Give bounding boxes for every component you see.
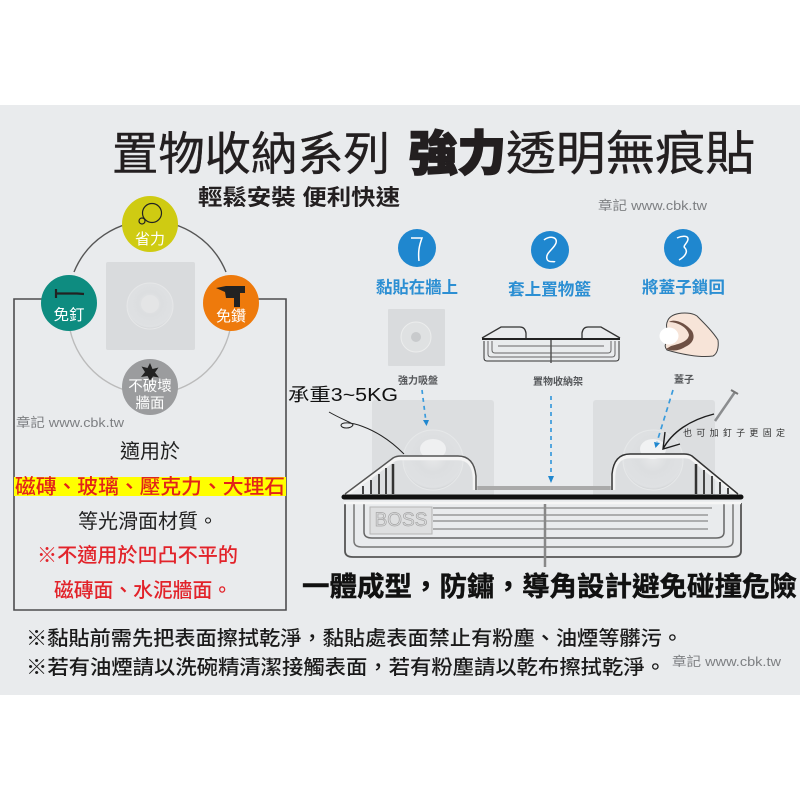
- BOSS plate: [370, 507, 432, 534]
- warning text: 磁磚面、水泥牆面。: [54, 579, 232, 602]
- text: applicable to: 適用於: [120, 440, 180, 463]
- curved arrow to cup: [663, 414, 714, 449]
- small part labels: [398, 373, 694, 388]
- step labels: 套上置物籃: [508, 279, 591, 299]
- badge: no drilling: [203, 275, 259, 331]
- badge: save effort: 省力: [135, 231, 165, 248]
- step 3 icon: [664, 229, 702, 267]
- highlighted materials: 磁磚、玻璃、壓克力、大理石: [15, 476, 285, 498]
- step labels: [376, 277, 725, 299]
- suction sticker center: [106, 262, 195, 350]
- subtitle: 輕鬆安裝 便利快速: [198, 185, 400, 210]
- badge: no wall damage: 牆面: [136, 395, 164, 412]
- badge: save effort: [122, 196, 178, 252]
- small basket: [482, 327, 620, 363]
- watermark bottom: 章記 www.cbk.tw: [672, 654, 782, 669]
- title: [112, 127, 755, 181]
- small part labels: 蓋子: [674, 373, 694, 386]
- hand holding cap: [660, 313, 718, 357]
- dashed arrow center: [548, 396, 554, 483]
- badge: no drilling: 免鑽: [216, 308, 246, 325]
- basket: [344, 454, 741, 567]
- right wall sticker: [593, 400, 715, 497]
- handwritten note: 也可加釘子更固定: [683, 427, 785, 438]
- small sticker: [388, 309, 445, 366]
- small part labels: 置物收納架: [533, 375, 583, 388]
- background panel: [0, 105, 800, 695]
- badge: no wall damage: [122, 359, 178, 415]
- title: 透明無痕貼: [506, 127, 755, 180]
- step labels: 將蓋子鎖回: [642, 277, 725, 297]
- step 2 icon: [531, 231, 569, 269]
- watermark top: 章記 www.cbk.tw: [598, 198, 708, 213]
- left wall sticker: [372, 400, 494, 497]
- watermark left: 章記 www.cbk.tw: [16, 415, 125, 430]
- cleaning note 2: ※若有油煙請以洗碗精清潔接觸表面，若有粉塵請以乾布擦拭乾淨。: [26, 656, 666, 679]
- badge: no nails: [41, 275, 97, 331]
- BOSS plate: BOSS: [375, 510, 427, 531]
- dashed arrow left: [422, 390, 429, 426]
- warning text: [37, 544, 238, 602]
- title: 強力: [409, 128, 506, 181]
- small part labels: 強力吸盤: [398, 374, 438, 387]
- step labels: 黏貼在牆上: [376, 278, 458, 297]
- dashed arrow right: [654, 390, 673, 448]
- step 1 icon: [398, 229, 436, 267]
- badge: no wall damage: 不破壞: [128, 378, 172, 395]
- text: smooth surfaces: 等光滑面材質。: [78, 510, 218, 533]
- nail: [715, 390, 738, 421]
- badge: no nails: 免釘: [53, 306, 85, 324]
- title: 置物收納系列: [112, 128, 390, 180]
- feature ring: [70, 221, 230, 394]
- leader line to basket: [329, 412, 404, 454]
- warning text: ※不適用於凹凸不平的: [37, 544, 238, 567]
- frame: applicable surfaces panel outline: [14, 299, 286, 610]
- cleaning note 1: ※黏貼前需先把表面擦拭乾淨，黏貼處表面禁止有粉塵、油煙等髒污。: [26, 627, 683, 650]
- basket headline: 一體成型，防鏽，導角設計避免碰撞危險: [302, 571, 797, 602]
- load capacity label: 承重3~5KG: [288, 385, 398, 405]
